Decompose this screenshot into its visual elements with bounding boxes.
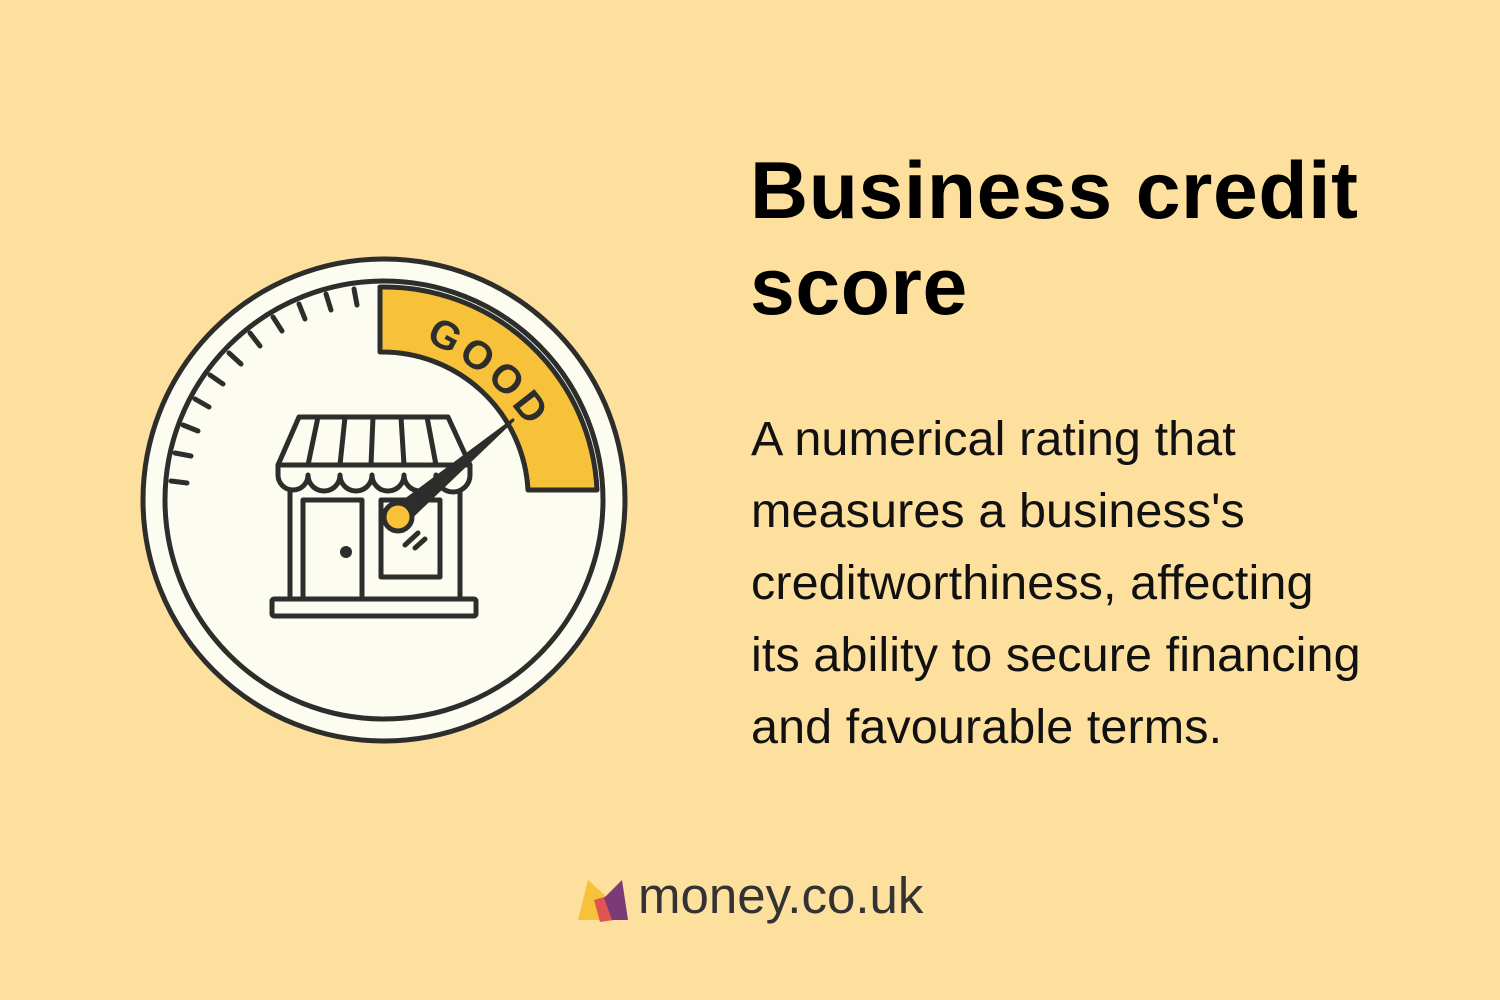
description text: measures a business's — [751, 484, 1245, 538]
tick marks — [171, 289, 357, 483]
good label: G — [421, 309, 469, 363]
gauge outer circle — [143, 259, 625, 741]
description text: A numerical rating that — [751, 412, 1236, 466]
gauge illustration: O — [452, 329, 503, 383]
gauge illustration — [140, 256, 628, 744]
logo: money.co.uk — [638, 867, 923, 924]
needle — [392, 420, 513, 524]
description text: and favourable terms. — [751, 700, 1222, 754]
store icon — [272, 417, 476, 616]
title: Business credit — [750, 146, 1359, 236]
description text: creditworthiness, affecting — [751, 556, 1314, 610]
description text: its ability to secure financing — [751, 628, 1361, 682]
gauge illustration: D — [504, 382, 556, 432]
good band — [380, 287, 597, 490]
gauge inner circle — [165, 281, 603, 719]
logo icon — [578, 880, 628, 922]
title — [750, 146, 1359, 332]
gauge illustration: O — [480, 353, 533, 406]
title: score — [750, 242, 968, 332]
description text — [751, 412, 1361, 754]
